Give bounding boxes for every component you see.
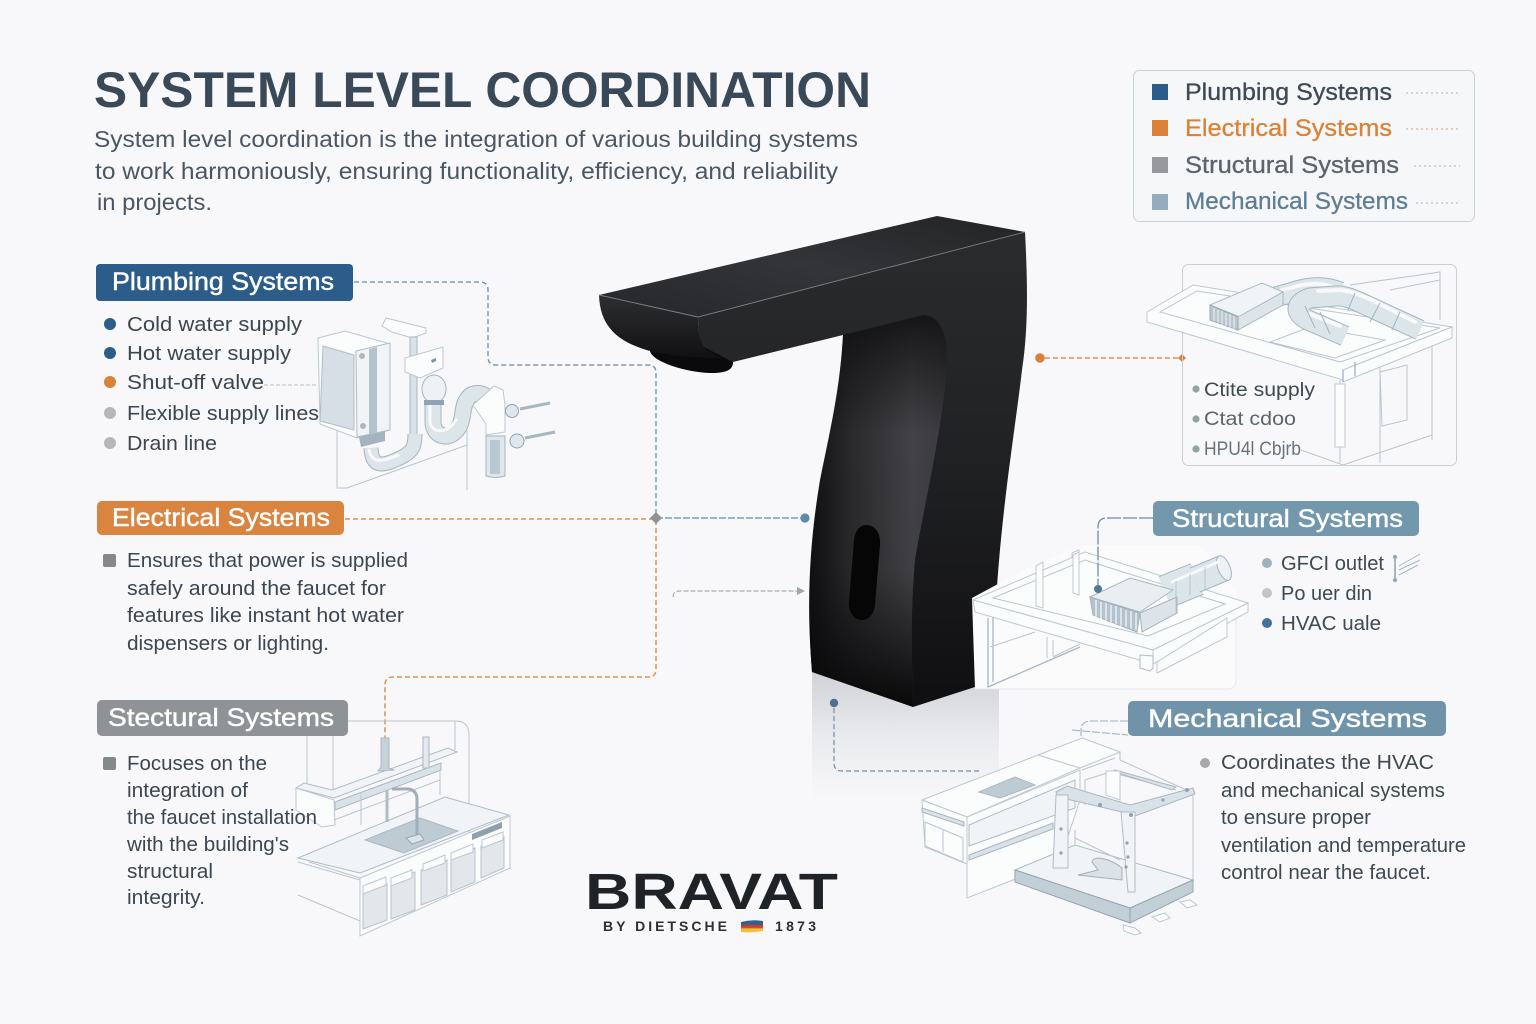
top right list: Ctat cdoo <box>1204 409 1296 430</box>
plumbing list: Flexible supply lines <box>127 402 319 425</box>
structural description: with the building's <box>126 833 289 856</box>
legend panel: Plumbing Systems <box>1185 79 1392 106</box>
mechanical badge <box>1128 701 1446 736</box>
intro paragraph: in projects. <box>97 189 212 215</box>
logo wordmark: BRAVAT <box>585 863 838 920</box>
mechanical description: to ensure proper <box>1221 806 1371 829</box>
structural badge: Stectural Systems <box>108 704 334 732</box>
mechanical badge: Mechanical Systems <box>1148 705 1427 733</box>
faucet: center face <box>809 315 947 707</box>
mechanical illustration <box>922 738 1197 935</box>
structural description <box>103 752 317 909</box>
faucet: top face <box>599 216 1025 317</box>
faucet reflection <box>812 672 999 800</box>
plumbing illustration <box>318 318 555 490</box>
connector: shut-off valve <box>264 384 318 386</box>
top right duct illustration <box>1147 264 1456 466</box>
mechanical description: Coordinates the HVAC <box>1221 751 1434 774</box>
connector: structural badge to heater <box>1094 518 1153 593</box>
faucet: spout end <box>599 295 722 358</box>
legend panel <box>1134 70 1474 222</box>
structural description: structural <box>127 860 213 883</box>
structural right list: HVAC uale <box>1281 612 1381 635</box>
plumbing badge <box>96 264 353 301</box>
plumbing list <box>104 313 319 455</box>
mechanical description <box>1200 751 1466 884</box>
electrical badge <box>97 501 344 535</box>
faucet: center face shading <box>809 315 947 707</box>
electrical description: safely around the faucet for <box>127 577 386 600</box>
logo tagline: BY DIETSCHE <box>603 918 727 934</box>
connector: faucet base to mechanical detail <box>830 699 980 771</box>
icon: level marker <box>1393 554 1420 582</box>
brand logo <box>585 863 838 934</box>
structural systems badge right <box>1153 501 1419 536</box>
legend panel: Structural Systems <box>1185 152 1399 179</box>
title: SYSTEM LEVEL COORDINATION <box>94 62 871 118</box>
mechanical description: ventilation and temperature <box>1221 834 1466 857</box>
intro paragraph: System level coordination is the integration of various building systems <box>94 126 858 152</box>
legend panel: Mechanical Systems <box>1185 188 1408 215</box>
faucet: sensor window <box>849 525 880 620</box>
structural right list: Po uer din <box>1281 582 1372 605</box>
structural badge <box>97 700 348 736</box>
mechanical description: and mechanical systems <box>1221 779 1445 802</box>
structural detail illustration <box>972 545 1248 689</box>
structural description: Focuses on the <box>127 752 267 775</box>
arrow: pointer to faucet sensor <box>673 587 805 597</box>
faucet: edge highlights <box>599 232 1025 317</box>
electrical badge: Electrical Systems <box>112 504 330 532</box>
electrical description: features like instant hot water <box>127 604 404 627</box>
plumbing badge: Plumbing Systems <box>112 268 334 296</box>
structural right list <box>1262 552 1384 635</box>
plumbing list: Cold water supply <box>127 313 303 336</box>
top right list <box>1192 380 1316 460</box>
connector: electrical to junction and structural <box>345 519 656 745</box>
structural systems badge right: Structural Systems <box>1172 505 1403 533</box>
structural right list: GFCI outlet <box>1281 552 1384 575</box>
connector: faucet to top right detail <box>1035 353 1186 363</box>
top right list: Ctite supply <box>1204 380 1316 401</box>
electrical description <box>103 549 408 655</box>
connector: junction to faucet body <box>650 512 810 524</box>
logo year: 1873 <box>775 918 816 934</box>
faucet: aerator <box>650 345 733 373</box>
connector: plumbing to spout and junction <box>354 282 656 518</box>
electrical description: dispensers or lighting. <box>127 632 329 655</box>
structural description: integrity. <box>127 886 205 909</box>
faucet <box>599 216 1027 707</box>
connector: mechanical badge <box>1072 721 1128 740</box>
legend panel: Electrical Systems <box>1185 115 1392 142</box>
electrical description: Ensures that power is supplied <box>127 549 408 572</box>
plumbing list: Shut-off valve <box>127 371 264 394</box>
top right list: HPU4l Cbjrb <box>1204 439 1301 460</box>
structural description: integration of <box>127 779 248 802</box>
faucet: side and spout surface <box>698 232 1027 707</box>
structural description: the faucet installation <box>127 806 317 829</box>
plumbing list: Drain line <box>127 432 217 455</box>
icon: german flag <box>741 920 763 932</box>
intro paragraph: to work harmoniously, ensuring functionality, efficiency, and reliability <box>95 158 839 184</box>
plumbing list: Hot water supply <box>127 342 292 365</box>
intro paragraph <box>94 126 858 215</box>
mechanical description: control near the faucet. <box>1221 861 1431 884</box>
kitchen illustration <box>296 721 510 936</box>
